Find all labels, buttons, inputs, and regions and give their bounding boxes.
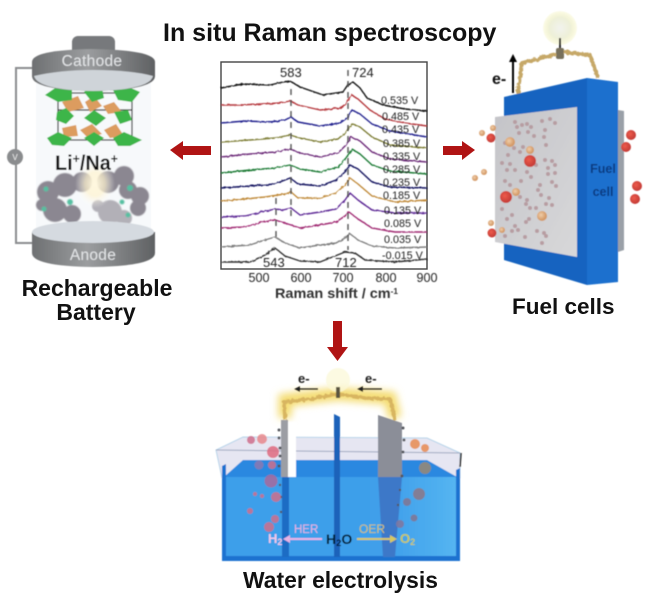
peak labels: [263, 65, 374, 270]
OER reaction: OER: [359, 522, 385, 536]
spectra curves: [221, 81, 427, 262]
voltage labels: 0.485 V: [382, 111, 420, 123]
axis tick labels: 600: [290, 271, 312, 285]
H2 label: 2: [277, 537, 282, 547]
electron arrow: e-: [492, 71, 506, 88]
panel: fuel cell: [472, 11, 642, 285]
voltage labels: 0.335 V: [383, 151, 421, 163]
ion label: +: [73, 151, 80, 166]
hydrogen bubbles: [247, 434, 281, 532]
ion label: +: [111, 151, 118, 166]
fuel cells caption: Fuel cells: [512, 294, 615, 319]
cathode crystal: [45, 85, 142, 146]
electron arrows and labels: e-: [298, 371, 310, 386]
voltage labels: 0.435 V: [382, 124, 420, 136]
oxygen bubbles: [396, 439, 431, 528]
axis title: Raman shift / cm: [275, 285, 387, 301]
H2O label: H: [326, 531, 336, 547]
reaction glow: [75, 160, 115, 208]
voltage labels: 0.035 V: [384, 234, 422, 246]
centre membrane: [334, 414, 340, 557]
panel: water electrolysis: [216, 368, 461, 561]
fuel cell label: cell: [593, 185, 613, 199]
anode particles: [36, 166, 149, 226]
electrode surface bubbles: [278, 426, 406, 513]
O2 label: 2: [410, 537, 415, 547]
voltmeter icon: V: [12, 153, 18, 162]
voltage labels: 0.135 V: [384, 205, 422, 217]
small light bulb: [326, 368, 350, 398]
voltage labels: -0.015 V: [382, 250, 424, 262]
tank rim line: [216, 450, 460, 453]
H2 label: H: [268, 531, 277, 546]
ion label: /Na: [80, 152, 111, 175]
HER reaction: [283, 524, 322, 543]
right electrode: [378, 415, 402, 557]
voltmeter icon: [7, 149, 23, 165]
peak labels: 712: [335, 255, 357, 270]
cathode cap: [32, 36, 155, 91]
axis tick labels: [248, 271, 438, 285]
electron arrows and labels: [294, 371, 382, 392]
water electrolysis caption: Water electrolysis: [243, 567, 438, 593]
battery circuit wire: [16, 68, 33, 243]
peak labels: 583: [280, 65, 302, 80]
gray electrode plate: [495, 107, 577, 257]
glow around wire: [285, 394, 395, 418]
gold wire: [518, 52, 598, 112]
battery caption: Rechargeable: [22, 275, 172, 301]
anode cap: [32, 221, 155, 267]
fuel cell label: Fuel: [590, 162, 616, 176]
axis tick labels: 700: [332, 271, 354, 285]
anode cap: Anode: [70, 247, 116, 264]
arrow: to fuel cells: [443, 141, 475, 160]
cathode cap: Cathode: [62, 53, 122, 70]
fuel cell label: [590, 162, 616, 199]
title: In situ Raman spectroscopy: [163, 19, 497, 47]
blue cell body: [504, 78, 618, 285]
peak labels: 724: [352, 65, 374, 80]
glass tank top: [216, 437, 460, 478]
ion label: Li: [55, 152, 74, 175]
panel: rechargeable battery: [7, 36, 155, 267]
peak guide lines: [276, 70, 348, 250]
electron arrows and labels: e-: [365, 371, 377, 386]
voltage labels: 0.185 V: [383, 190, 421, 202]
orange gas particles: [472, 125, 547, 233]
red gas particles: [486, 130, 642, 238]
peak labels: 543: [263, 255, 285, 270]
small gas particles: [500, 117, 558, 245]
voltage labels: 0.385 V: [383, 138, 421, 150]
voltage labels: 0.235 V: [383, 177, 421, 189]
glass cylinder: [36, 78, 151, 238]
axis tick labels: 500: [248, 271, 270, 285]
voltage labels: 0.535 V: [381, 95, 419, 107]
voltage labels: 0.285 V: [383, 164, 421, 176]
H2O label: O: [341, 531, 352, 547]
H2O label: 2: [336, 538, 341, 549]
HER reaction: HER: [294, 524, 318, 536]
light bulb: [543, 11, 577, 59]
left electrode: [281, 420, 296, 557]
battery caption line 2: Battery: [56, 299, 136, 325]
electron arrow: [492, 54, 517, 93]
back plate: [618, 110, 624, 252]
axis tick labels: 900: [416, 271, 438, 285]
gold wire: [284, 394, 395, 420]
water body: [222, 460, 460, 561]
voltage labels: 0.085 V: [384, 218, 422, 230]
OER reaction: [357, 522, 397, 543]
axis tick labels: 800: [375, 271, 397, 285]
voltage labels: [381, 95, 424, 262]
axis title: -1: [391, 287, 399, 296]
arrow: to water electrolysis: [327, 321, 348, 361]
arrow: to battery: [170, 141, 211, 160]
panel: Raman chart: [221, 62, 438, 301]
tank corner edge: [460, 453, 461, 467]
O2 label: O: [400, 531, 410, 546]
plot frame: [221, 62, 427, 269]
